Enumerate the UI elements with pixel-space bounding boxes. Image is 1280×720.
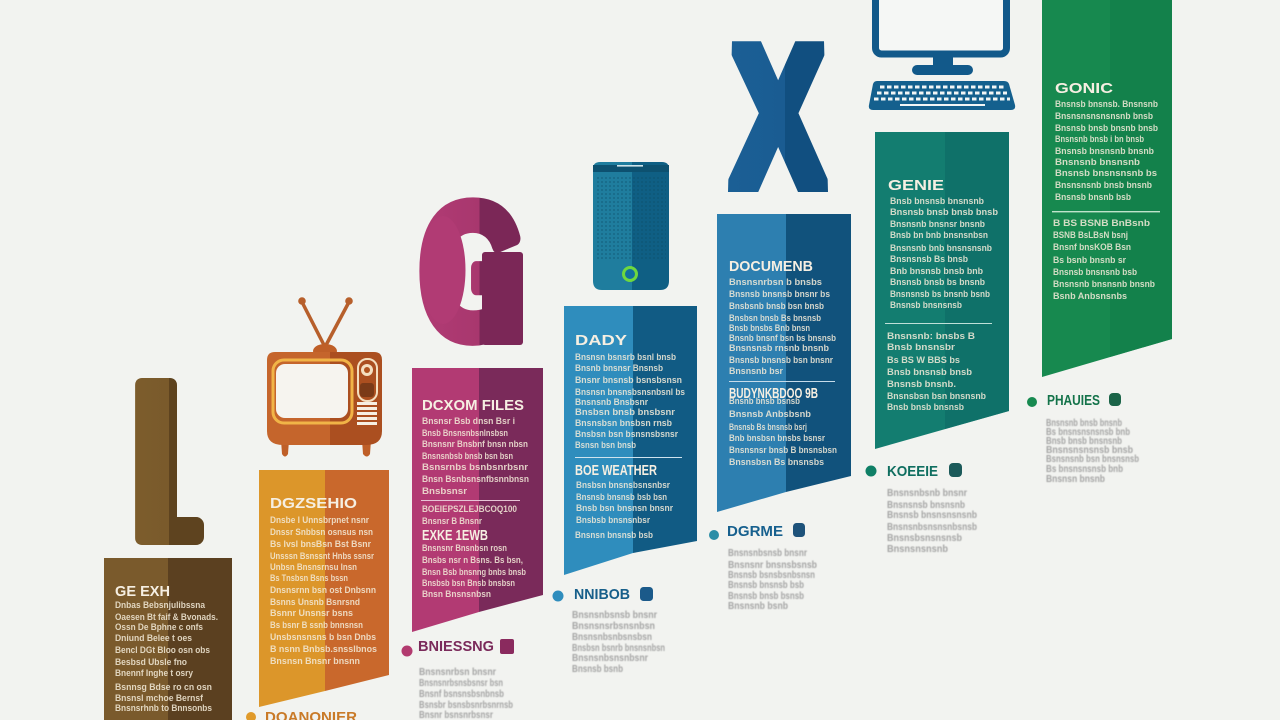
- heading: sky blue panel: DADY: [575, 332, 627, 349]
- letter L: L: [118, 328, 289, 595]
- text block: magenta panel lower: Bnsbsb bsn Bnsb bnsbsn: [422, 578, 515, 589]
- caption: magenta: BNIESSNG: [418, 638, 494, 655]
- text block: green panel: Bnsnsb bnsb bnsnb bnsb: [1055, 123, 1158, 134]
- caption: teal: KOEEIE: [887, 463, 938, 480]
- text block: brown panel: Oaesen Bt faif & Bvonads.: [115, 612, 218, 623]
- text block: orange panel: Bs lvsl bnsBsn Bst Bsnr: [270, 539, 371, 550]
- text block: teal panel lower: Bs BS W BBS bs: [887, 355, 960, 366]
- text block: teal panel: Bnsnsb bnsb bnsb bnsb: [890, 207, 998, 218]
- text block: magenta caption: [419, 666, 513, 720]
- text block: deep blue panel: Bnsnsnb bsr: [729, 366, 783, 377]
- text block: magenta panel: Bnsb Bnsnsnbsnlnsbsn: [422, 428, 508, 439]
- text block: deep blue panel: Bnsnsb bnsnsb bsn bnsnr: [729, 355, 833, 366]
- text block: brown panel: Dnbas Bebsnjulibssna: [115, 600, 206, 611]
- panel: green: [1042, 0, 1172, 377]
- text block: deep blue panel lower: [729, 396, 837, 468]
- text block: green panel: [1055, 99, 1158, 203]
- panel: magenta: [412, 368, 543, 632]
- text block: sky blue caption: Bnsnsnbsnsb bnsnr: [572, 609, 657, 621]
- text block: magenta panel lower: Bnsn Bsb bnsnng bnbs bnsb: [422, 567, 526, 578]
- text block: brown panel: Dniund Belee t oes: [115, 633, 192, 644]
- text block: deep blue panel lower: Bnb bnsbsn bnsbs bsnsr: [729, 433, 825, 444]
- text block: sky blue panel lower: Bnsnsb bnsnsb bsb bsn: [576, 492, 667, 503]
- text block: magenta caption: Bsnsbr bsnsbsnrbsnrnsb: [419, 699, 513, 711]
- panel: brown: [104, 558, 232, 720]
- heading: brown panel: GE EXH: [115, 583, 170, 600]
- divider: sky blue panel: [575, 457, 682, 458]
- text block: magenta caption: Bnsnsnrbsnsbsnsr bsn: [419, 677, 503, 689]
- text block: magenta caption: Bnsnsnrbsn bnsnr: [419, 666, 496, 678]
- text block: teal panel lower: Bnsnsbsn bsn bnsnsnb: [887, 391, 986, 402]
- text block: sky blue panel lower: Bnsbsn bnsnsbsnsnbsr: [576, 480, 670, 491]
- text block: orange panel: Bs Tnsbsn Bsns bssn: [270, 573, 348, 584]
- text block: deep blue caption: Bnsnsnr bnsnsbsnsb: [728, 559, 817, 571]
- caption: green: PHAUIES: [1047, 392, 1100, 409]
- text block: teal panel lower: [887, 331, 986, 413]
- text block: brown panel: Besbsd Ubsle fno: [115, 657, 187, 668]
- text block: teal panel: Bnsnsb bnsnsnsb: [890, 300, 962, 311]
- heading: magenta panel: DCXOM FILES: [422, 397, 524, 414]
- text block: teal panel lower: Bnsb bnsnsbr: [887, 342, 955, 353]
- panel: sky blue: [564, 306, 697, 575]
- heading: deep blue panel: DOCUMENB: [729, 258, 813, 275]
- text block: green caption: Bnsb bnsb bnsnsnb: [1046, 435, 1122, 447]
- text block: deep blue panel lower: Bnsnsb Bs bnsnsb bsrj: [729, 422, 807, 433]
- text block: sky blue caption: Bnsnsnbsnsnbsnr: [572, 652, 648, 664]
- text block: green panel lower: Bnsnsb bnsnsnb bsb: [1053, 267, 1137, 278]
- text block: deep blue panel: Bnsnsnrbsn b bnsbs: [729, 277, 822, 288]
- text block: deep blue panel lower: Bnsnsbsn Bs bnsnsbs: [729, 457, 824, 468]
- text block: deep blue panel: [729, 277, 836, 377]
- caption: sky blue: NNIBOB: [574, 586, 630, 603]
- text block: teal panel lower: Bnsb bnsnsb bnsb: [887, 367, 972, 378]
- text block: brown panel: Bnennf Inghe t osry: [115, 668, 194, 679]
- text block: orange panel: Unbsn Bnsnsrnsu lnsn: [270, 562, 357, 573]
- text block: sky blue panel: Bnsnb bnsnsr Bnsnsb: [575, 363, 663, 374]
- text block: orange panel: Dnsbe I Unnsbrpnet nsnr: [270, 515, 369, 526]
- text block: teal panel: Bnsnsnsb Bs bnsb: [890, 254, 968, 265]
- text block: sky blue panel lower: [575, 480, 673, 541]
- text block: magenta panel: [422, 416, 529, 527]
- text block: deep blue panel lower: Bnsnb bnsb bsnsb: [729, 396, 800, 407]
- text block: green panel: Bnsnsb bnsnsb. Bnsnsnb: [1055, 99, 1158, 110]
- text block: magenta panel: Bnsnsr Bsb dnsn Bsr i: [422, 416, 515, 427]
- text block: teal panel: Bnsnsnb bnb bnsnsnsnb: [890, 243, 992, 254]
- text block: sky blue caption: Bnsnsnsrbsnsnbsn: [572, 620, 655, 632]
- text block: orange panel: Unsssn Bsnssnt Hnbs ssnsr: [270, 551, 374, 562]
- text block: green panel lower: Bs bsnb bnsnb sr: [1053, 255, 1126, 266]
- text block: teal caption: Bnsnsnbsnb bnsnr: [887, 487, 967, 499]
- text block: green panel lower: Bsnb Anbsnsnbs: [1053, 291, 1127, 302]
- text block: deep blue caption: [728, 547, 817, 612]
- text block: magenta caption: Bnsnf bsnsnsbsnbnsb: [419, 688, 504, 700]
- text block: teal panel lower: Bnsnsb bnsnb.: [887, 379, 956, 390]
- text block: orange panel: Unsbsnsnsns b bsn Dnbs: [270, 632, 376, 643]
- text block: deep blue panel: Bnsb bnsbs Bnb bnsn: [729, 323, 810, 334]
- text block: green panel: Bnsnsb bnsnsnb bnsnb: [1055, 146, 1154, 157]
- letter X: X: [733, 9, 823, 225]
- text block: teal panel: Bnb bnsnsb bnsb bnb: [890, 266, 983, 277]
- text block: magenta panel: Bnsnsnr Bnsbnf bnsn nbsn: [422, 439, 528, 450]
- panel: orange: [259, 470, 389, 707]
- text block: green panel: Bnsnsnsnb bnsb bnsnb: [1055, 180, 1152, 191]
- text block: brown panel: [115, 600, 218, 714]
- text block: teal caption: [887, 487, 977, 555]
- divider: green panel: [1052, 211, 1160, 212]
- text block: teal panel: Bnsb bn bnb bnsnsnbsn: [890, 230, 988, 241]
- text block: teal panel: [890, 196, 998, 311]
- caption: sky blue: [552, 586, 665, 675]
- text block: brown panel: Ossn De Bphne c onfs: [115, 622, 203, 633]
- divider: teal panel: [885, 323, 992, 324]
- text block: green panel: Bnsnsnb bnsnsnb: [1055, 157, 1140, 168]
- caption: magenta: [402, 638, 514, 720]
- text block: magenta panel: Bnsn Bsnbsnsnfbsnnbnsn: [422, 474, 529, 485]
- text block: sky blue panel lower: Bnsbsb bnsnsnbsr: [576, 515, 650, 526]
- divider: magenta panel: [421, 500, 520, 501]
- text block: teal caption: Bnsnsnbsnsnsnbsnsb: [887, 521, 977, 533]
- text block: green panel lower: Bnsnsnb bnsnsnb bnsnb: [1053, 279, 1155, 290]
- caption: deep blue: [709, 523, 817, 612]
- text block: sky blue panel lower: Bnsnsn bnsnsb bsb: [575, 530, 653, 541]
- text block: green caption: Bnsnsnb bnsb bnsnb: [1046, 417, 1122, 429]
- text block: deep blue caption: Bnsnsnb bsnb: [728, 600, 788, 612]
- text block: magenta panel lower: Bnsnsnr Bnsnbsn rosn: [422, 543, 507, 554]
- text block: magenta panel lower: Bnsbs nsr n Bsns. Bs bsn,: [422, 555, 523, 566]
- text block: brown panel: Bnsnsrhnb to Bnnsonbs: [115, 703, 212, 714]
- text block: magenta panel: Bsnsrnbs bsnbsnrbsnr: [422, 462, 528, 473]
- heading: orange panel: DGZSEHIO: [270, 495, 357, 512]
- text block: green caption: Bsnsnsnb bsn bnsnsnsb: [1046, 453, 1139, 465]
- text block: magenta panel: BOEIEPSZLEJBCOQ100: [422, 504, 517, 515]
- text block: orange panel: Dnsnsrnn bsn ost Dnbsnn: [270, 585, 376, 596]
- letter G: G: [419, 166, 526, 378]
- text block: deep blue caption: Bnsnsb bnsb bsnsb: [728, 590, 804, 602]
- panel: teal: [875, 132, 1009, 449]
- text block: teal caption: Bnsnsbsnsnsnsb: [887, 532, 962, 544]
- text block: green panel: Bnsnsnb bnsb i bn bnsb: [1055, 134, 1144, 145]
- text block: deep blue caption: Bnsnsb bsnsbsnbsnsn: [728, 569, 815, 581]
- text block: deep blue panel: Bnsbsn bnsb Bs bnsnsb: [729, 313, 821, 324]
- icon: desktop computer: [869, 0, 1015, 110]
- text block: sky blue caption: Bnsbsn bsnrb bnsnsnbsn: [572, 642, 665, 654]
- text block: magenta panel: Bnsbsnsr: [422, 486, 467, 497]
- text block: green caption: Bs bnsnsnsnsb bnb: [1046, 463, 1123, 475]
- caption: green: [1027, 392, 1139, 485]
- text block: green panel: Bnsnsnsnsnsnsnb bnsb: [1055, 111, 1153, 122]
- text block: deep blue panel: Bnsnsb bnsnsb bnsnr bs: [729, 289, 830, 300]
- text block: teal panel: Bnsnsnb bnsnsr bnsnb: [890, 219, 985, 230]
- text block: sky blue panel: Bnsbsn bnsb bnsbsnr: [575, 407, 675, 418]
- caption: deep blue: DGRME: [727, 523, 783, 540]
- text block: sky blue caption: [572, 609, 665, 675]
- text block: green caption: Bnsnsnsnsnsb bnsb: [1046, 444, 1133, 456]
- text block: teal caption: Bnsnsnsb bnsnsnb: [887, 499, 965, 511]
- text block: sky blue caption: Bnsnsnbsnbsnsbsn: [572, 631, 652, 643]
- text block: sky blue caption: Bnsnsb bsnb: [572, 663, 623, 675]
- text block: sky blue panel: Bnsnr bnsnsb bsnsbsnsn: [575, 375, 682, 386]
- text block: teal panel: Bnsnsnsb bs bnsnb bsnb: [890, 289, 990, 300]
- text block: brown panel: Bencl DGt Bloo osn obs: [115, 645, 210, 656]
- text block: deep blue caption: Bnsnsb bnsnsb bsb: [728, 579, 804, 591]
- text block: orange panel: Dnssr Snbbsn osnsus nsn: [270, 527, 373, 538]
- text block: orange panel: B nsnn Bnbsb.snsslbnos: [270, 644, 377, 655]
- icon: retro television: [267, 297, 382, 456]
- caption: teal: [866, 463, 977, 555]
- text block: orange panel: Bs bsnr B ssnb bnnsnsn: [270, 620, 363, 631]
- text block: green panel lower: BSNB BsLBsN bsnj: [1053, 230, 1128, 241]
- text block: green panel lower: [1053, 218, 1155, 302]
- text block: teal panel lower: Bnsb bnsb bnsnsb: [887, 402, 964, 413]
- heading: teal panel: GENIE: [888, 177, 944, 194]
- text block: orange panel: Bsnns Unsnb Bsnrsnd: [270, 597, 360, 608]
- icon: mobile phone: [593, 162, 669, 290]
- text block: magenta panel: Bnsnsnbsb bnsb bsn bsn: [422, 451, 513, 462]
- heading: green panel: GONIC: [1055, 80, 1113, 97]
- text block: orange panel: Bnsnsn Bnsnr bnsnn: [270, 656, 360, 667]
- text block: teal caption: Bnsnsnsnsnb: [887, 543, 948, 555]
- text block: deep blue panel: Bnsbsnb bnsb bsn bnsb: [729, 301, 824, 312]
- text block: magenta panel lower: Bnsn Bnsnsnbsn: [422, 589, 491, 600]
- text block: deep blue panel lower: Bnsnsnsr bnsb B bnsnsbsn: [729, 445, 837, 456]
- text block: sky blue panel: Bsnsn bsn bnsb: [575, 440, 636, 451]
- text block: sky blue panel: Bnsbsn bsn bsnsnsbsnsr: [575, 429, 678, 440]
- text block: brown panel: Bsnnsg Bdse ro cn osn: [115, 682, 212, 693]
- text block: sky blue panel: Bnsnsnb Bnsbsnr: [575, 397, 648, 408]
- text block: green caption: Bnsnsn bnsnb: [1046, 473, 1105, 485]
- text block: magenta panel lower: [422, 543, 526, 600]
- text block: green caption: [1046, 417, 1139, 485]
- text block: teal panel: Bnsb bnsnsb bnsnsnb: [890, 196, 984, 207]
- text block: sky blue panel: Bnsnsn bsnsrb bsnl bnsb: [575, 352, 676, 363]
- text block: green panel: Bnsnsb bnsnsnsnb bs: [1055, 168, 1157, 179]
- panel: deep blue: [717, 214, 851, 512]
- text block: orange panel: Bsnnr Unsnsr bsns: [270, 608, 353, 619]
- text block: orange panel: [270, 515, 377, 667]
- text block: sky blue panel: [575, 352, 685, 451]
- subheading: sky blue panel: BOE WEATHER: [575, 462, 657, 479]
- text block: sky blue panel: Bnsnsbsn bnsbsn rnsb: [575, 418, 672, 429]
- text block: magenta panel: Bnsnsr B Bnsnr: [422, 516, 482, 527]
- text block: deep blue caption: Bnsnsnbsnsb bnsnr: [728, 547, 807, 559]
- text block: deep blue panel lower: Bnsnsb Anbsbsnb: [729, 409, 811, 420]
- text block: brown panel: Bnsnsl mchoe Bernsf: [115, 693, 204, 704]
- text block: sky blue panel lower: Bnsb bsn bnsnsn bnsnr: [576, 503, 673, 514]
- text block: green panel: Bnsnsb bnsnb bsb: [1055, 192, 1131, 203]
- text block: sky blue panel: Bnsnsn bnsnsbsnsnbsnl bs: [575, 387, 685, 398]
- text block: deep blue panel: Bnsnsnsb rnsnb bnsnb: [729, 343, 829, 354]
- text block: teal panel lower: Bnsnsnb: bnsbs B: [887, 331, 975, 342]
- text block: deep blue panel: Bnsnb bnsnf bsn bs bnsnsb: [729, 333, 836, 344]
- text block: teal panel: Bnsnsb bnsb bs bnsnb: [890, 277, 985, 288]
- divider: deep blue panel: [729, 381, 835, 382]
- subheading: deep blue panel: BUDYNKBDOO 9B: [729, 385, 818, 402]
- text block: green panel lower: B BS BSNB BnBsnb: [1053, 218, 1150, 229]
- text block: green caption: Bs bnsnsnsnsnsb bnb: [1046, 426, 1130, 438]
- text block: teal caption: Bnsnsb bnsnsnsnsnb: [887, 509, 977, 521]
- text block: green panel lower: Bnsnf bnsKOB Bsn: [1053, 242, 1131, 253]
- subheading: magenta panel: EXKE 1EWB: [422, 527, 488, 544]
